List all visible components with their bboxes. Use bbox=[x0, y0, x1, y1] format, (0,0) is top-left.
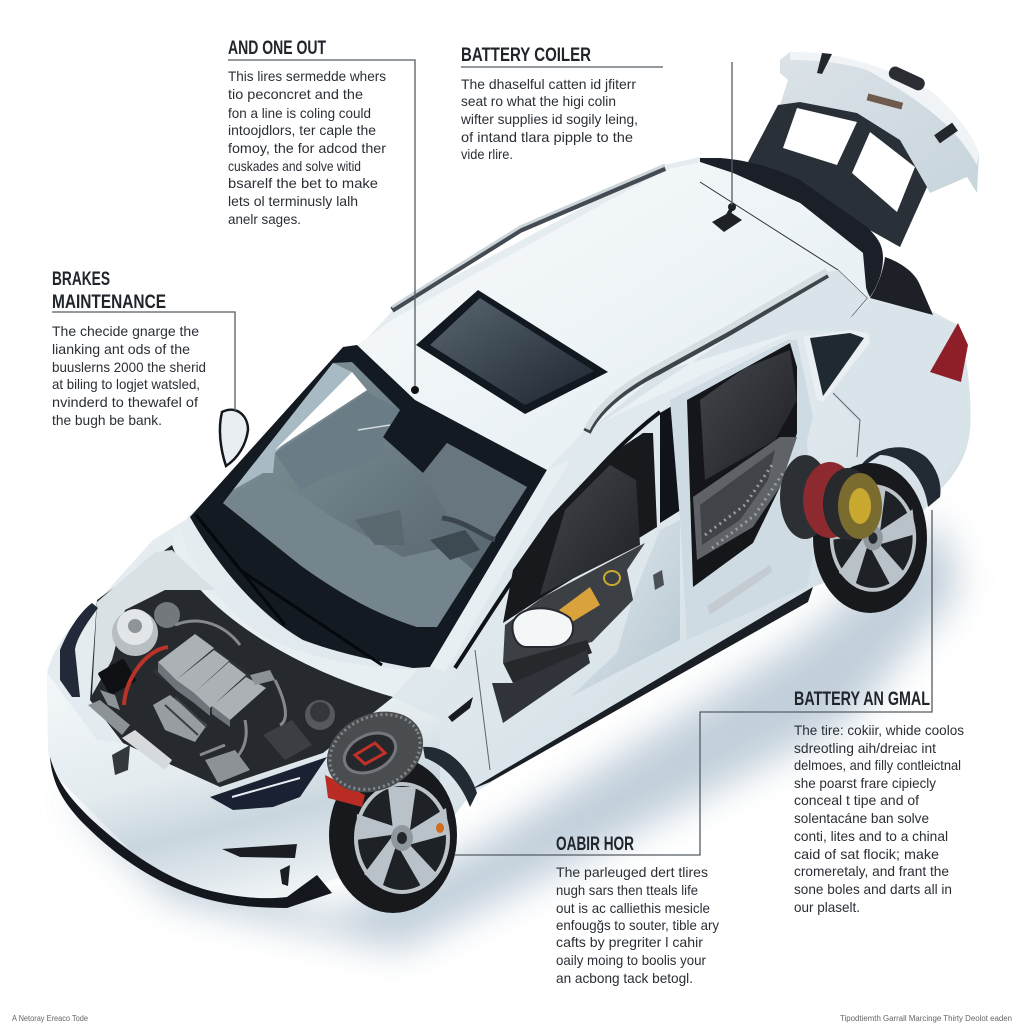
steering wheel bbox=[442, 518, 495, 540]
dashboard bbox=[223, 473, 473, 627]
callout: battery an gmal: she poarst frare cipiecly bbox=[794, 775, 936, 791]
hood cowl bbox=[172, 523, 417, 698]
open tailgate bbox=[748, 52, 979, 247]
door b pillar bbox=[660, 400, 692, 523]
windshield bbox=[190, 345, 547, 668]
door seam bbox=[475, 650, 490, 770]
callout: battery coiler: wifter supplies id sogily leing, bbox=[460, 111, 638, 127]
callout: and one out: anelr sages. bbox=[228, 211, 301, 227]
callout: and one out bbox=[228, 38, 386, 227]
callout: battery an gmal: cromeretaly, and frant the bbox=[794, 863, 949, 879]
pillar reflection bbox=[233, 363, 352, 490]
callout: oabir hor: out is ac calliethis mesicle bbox=[556, 900, 710, 916]
callout: oabir hor: cafts by pregriter l cahir bbox=[556, 934, 703, 950]
intake manifold bbox=[153, 695, 207, 742]
callout: brakes maintenance: MAINTENANCE bbox=[52, 292, 166, 313]
rear dark header bbox=[700, 158, 883, 297]
callout: battery coiler bbox=[460, 45, 638, 162]
carpet floor bbox=[492, 650, 590, 723]
callout: and one out: AND ONE OUT bbox=[228, 38, 326, 59]
rear tire and brake assembly bbox=[780, 455, 882, 540]
door handle bbox=[653, 570, 664, 590]
tailgate window 1 bbox=[783, 108, 857, 165]
callout: and one out: This lires sermedde whers bbox=[228, 68, 386, 84]
callout: battery an gmal: The tire: cokiir, whide coolos bbox=[794, 722, 964, 738]
callout: brakes maintenance: at biling to logjet watsled, bbox=[52, 376, 200, 392]
callout: oabir hor: OABIR HOR bbox=[556, 834, 634, 855]
ground shadow bbox=[60, 520, 960, 950]
callout: and one out: fomoy, the for adcod ther bbox=[228, 140, 386, 156]
callout: brakes maintenance: buuslerns 2000 the sherid bbox=[52, 359, 206, 375]
A pillar bbox=[430, 460, 570, 672]
red hose bbox=[124, 647, 168, 705]
callout: battery coiler: of intand tlara pipple to the bbox=[461, 129, 633, 145]
underbody sill bbox=[470, 587, 813, 790]
callout: battery an gmal: conti, lites and to a chinal bbox=[794, 828, 948, 844]
engine hoses and parts bbox=[175, 621, 285, 770]
callout: and one out: intoojdlors, ter caple the bbox=[228, 122, 376, 138]
nose shading bbox=[47, 673, 440, 908]
tailgate window 2 bbox=[852, 132, 915, 212]
rear seat bbox=[423, 443, 527, 537]
battery box bbox=[98, 658, 136, 696]
sunroof bbox=[416, 290, 608, 414]
reservoir cap bbox=[154, 602, 180, 628]
callout: battery an gmal: caid of sat flocik; make bbox=[794, 846, 939, 862]
callout: brakes maintenance: nvinderd to thewafel of bbox=[52, 394, 198, 410]
rear wheel bbox=[813, 447, 940, 613]
footer left: A Netoray Ereaco Tode bbox=[12, 1014, 89, 1023]
callout: and one out: tio peconcret and the bbox=[228, 86, 363, 102]
right reservoir cap bbox=[305, 700, 335, 730]
callout: battery coiler: seat ro what the higi colin bbox=[461, 93, 616, 109]
callout: oabir hor: nugh sars then tteals life bbox=[556, 882, 698, 898]
door face bbox=[570, 520, 680, 697]
yellow label bbox=[559, 587, 600, 622]
right black box bbox=[263, 720, 312, 760]
callout: and one out: bsarelf the bet to make bbox=[228, 175, 378, 191]
rear sill trim bbox=[707, 565, 772, 615]
yellow badge bbox=[604, 571, 620, 585]
battery modules bbox=[152, 634, 267, 727]
callout: brakes maintenance bbox=[52, 269, 206, 428]
callout: battery an gmal: our plaselt. bbox=[794, 899, 860, 915]
callout: oabir hor bbox=[556, 834, 719, 986]
panel line bbox=[833, 393, 860, 457]
callout: brakes maintenance: the bugh be bank. bbox=[52, 412, 162, 428]
air filter bbox=[112, 609, 158, 656]
tail light bbox=[930, 323, 968, 382]
callout: battery coiler: vide rlire. bbox=[461, 146, 513, 162]
glitter seat wrap bbox=[693, 437, 797, 560]
callout: brakes maintenance: The checide gnarge the bbox=[52, 323, 199, 339]
callout: battery an gmal: solentacáne ban solve bbox=[794, 810, 929, 826]
bumper vents bbox=[222, 844, 297, 886]
callout: battery coiler: BATTERY COILER bbox=[461, 45, 591, 66]
callout: battery an gmal: BATTERY AN GMAL bbox=[794, 689, 930, 710]
leader lines bbox=[52, 60, 932, 855]
callout: battery an gmal: sdreotling aih/dreiac int bbox=[794, 740, 936, 756]
callout: oabir hor: enfougğs to souter, tible ary bbox=[556, 917, 719, 933]
seat back bbox=[540, 465, 640, 595]
right side body panel bbox=[590, 270, 970, 480]
roof rail left bbox=[392, 168, 665, 310]
left mirror bbox=[220, 410, 248, 466]
callout: and one out: cuskades and solve witid bbox=[228, 158, 361, 174]
callout: battery coiler: The dhaselful catten id jfiterr bbox=[461, 76, 636, 92]
callout: battery an gmal bbox=[794, 689, 964, 915]
rear door opening bbox=[670, 340, 813, 640]
front wheel bbox=[329, 747, 477, 913]
front bumper lower lip bbox=[50, 757, 332, 908]
callout: oabir hor: oaily moing to boolis your bbox=[556, 952, 706, 968]
engine bay bbox=[88, 545, 393, 787]
rear spoiler bbox=[870, 257, 933, 315]
roof bbox=[357, 162, 867, 470]
centre console bbox=[355, 510, 405, 545]
callout: battery an gmal: conceal t tipe and of bbox=[794, 792, 919, 808]
side vent bbox=[448, 697, 473, 722]
callout: battery an gmal: delmoes, and filly contleictnal bbox=[794, 757, 961, 773]
car body bbox=[47, 157, 970, 908]
callout: and one out: fon a line is coling could bbox=[228, 105, 371, 121]
door panel bbox=[503, 543, 645, 663]
silver bracket bbox=[122, 730, 172, 770]
roof antenna bbox=[712, 203, 742, 232]
interior door bbox=[275, 392, 400, 490]
small silver parts bbox=[88, 670, 275, 783]
footer right: Tipodtiemth Garrall Marcinge Thirty Deolot eaden bbox=[840, 1014, 1012, 1023]
right headlight bbox=[210, 757, 327, 810]
callout: and one out: lets ol terminusly lalh bbox=[228, 193, 358, 209]
wipers bbox=[196, 515, 382, 665]
side mirror bbox=[512, 608, 573, 647]
callout: battery an gmal: sone boles and darts all in bbox=[794, 881, 952, 897]
left headlight bbox=[60, 603, 98, 697]
callout: brakes maintenance: BRAKES bbox=[52, 269, 110, 290]
roof seam bbox=[700, 182, 867, 318]
front door opening bbox=[455, 400, 692, 770]
rear quarter window bbox=[803, 330, 870, 402]
nose badge bbox=[112, 745, 130, 775]
callout: oabir hor: The parleuged dert tlires bbox=[556, 864, 708, 880]
loose front tire bbox=[314, 696, 436, 808]
seat cushion bbox=[503, 640, 592, 683]
callout: brakes maintenance: lianking ant ods of the bbox=[52, 341, 190, 357]
roof rail right bbox=[587, 274, 827, 432]
white sliver bbox=[275, 372, 367, 450]
callout: oabir hor: an acbong tack betogl. bbox=[556, 970, 693, 986]
cluster bbox=[430, 530, 480, 560]
